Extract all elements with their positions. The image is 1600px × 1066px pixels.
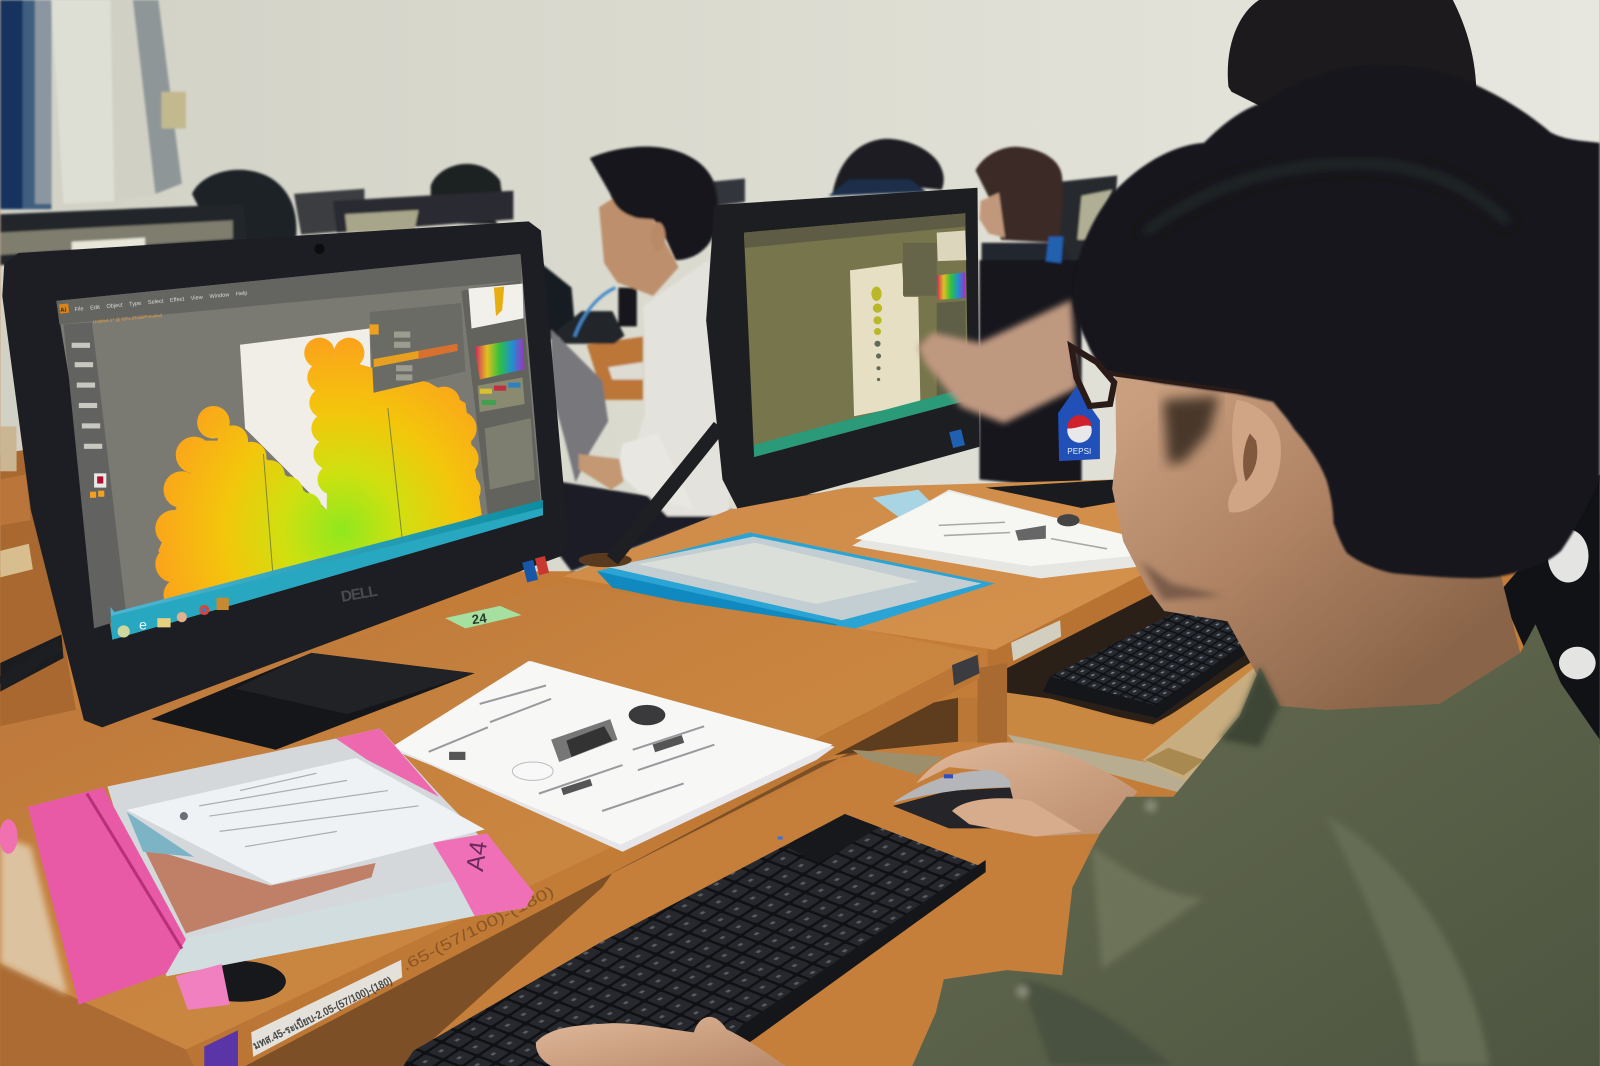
underside of front desk and keyboard tray: [245, 698, 1112, 1066]
app menu bar: [56, 254, 522, 324]
shirt folds and button: [1016, 667, 1490, 1066]
cable conduit: [0, 426, 719, 683]
mouse: [893, 770, 1020, 828]
windows taskbar: [110, 500, 543, 640]
right hand on mouse: [916, 742, 1138, 836]
glasses: [1071, 347, 1247, 406]
rear desk surface: [563, 479, 1153, 743]
second monitor screen: [744, 213, 969, 457]
pink zipper band: [0, 788, 230, 1010]
white label on desk edge: มทส.45-ระเบียบ-2.05-(57/100)-(180): [251, 974, 395, 1052]
purple tag on desk edge: [204, 1030, 238, 1066]
right side panels: [461, 281, 541, 515]
blue zip folder: [597, 532, 995, 634]
left side desk behind monitor: [0, 426, 77, 734]
checked cloth: [551, 329, 608, 483]
background monitors and classmates: [0, 139, 1117, 490]
classmate with dark hair and navy shirt: [833, 139, 944, 194]
guide lines: [263, 408, 402, 583]
tool column: [63, 322, 127, 628]
main screen: [56, 254, 543, 640]
number sticker 24: [445, 606, 522, 628]
arm of passing person: [918, 300, 1077, 423]
handwritten desk code: .65-(57/100)-(180): [399, 883, 557, 975]
ear: [1228, 400, 1281, 512]
polka-dot sleeve at right edge: [1500, 474, 1600, 745]
second monitor: [706, 188, 980, 543]
left hand on keyboard: [536, 1017, 786, 1066]
pink clear pouch: [0, 728, 534, 1010]
gradient panel: [370, 303, 465, 393]
window, curtain and column at left: [0, 0, 186, 209]
front worksheet papers: [392, 661, 835, 852]
white shirt: [623, 260, 733, 516]
sideburn: [1163, 396, 1219, 465]
pepsi can: [1058, 387, 1100, 461]
lower right shelf and keyboard: [1007, 571, 1275, 794]
worksheet content: [429, 686, 714, 811]
thumb over mouse: [952, 798, 1082, 836]
windows taskbar: e: [139, 617, 147, 633]
clear body: [107, 728, 534, 976]
app menu bar: Ai: [60, 307, 67, 314]
person behind man: long dark hair: [1228, 0, 1476, 143]
pepsi can: PEPSI: [1067, 447, 1091, 456]
rear papers: [852, 479, 1143, 578]
classmate with brown hair: [975, 147, 1063, 243]
main monitor stand: [151, 653, 475, 750]
gradient circles artwork: [155, 338, 482, 611]
man's hair: [1073, 66, 1600, 578]
rear keyboard: [1043, 600, 1253, 718]
app menu bar: File Edit Object Type Select Effect View Window Help: [74, 291, 248, 313]
wall background: [0, 0, 1600, 571]
loose letter on pouch: [127, 758, 485, 884]
front keyboard: [403, 814, 986, 1066]
head: [590, 147, 718, 296]
forearm: [579, 454, 624, 490]
main monitor: [2, 221, 568, 727]
A4 marking: A4: [462, 840, 493, 873]
white artboard: [240, 328, 376, 551]
student in white shirt: [541, 147, 735, 571]
app menu bar: Untitled-1* @ 83% (RGB/Preview): [93, 313, 163, 324]
olive shirt: [912, 624, 1600, 1066]
stubble: [1141, 561, 1222, 600]
front desk surface: [0, 583, 980, 1066]
intel and windows stickers: [522, 556, 549, 582]
number sticker 24: 24: [471, 610, 488, 627]
dell logo: DELL: [340, 583, 379, 606]
man's face and neck: [1112, 375, 1520, 724]
